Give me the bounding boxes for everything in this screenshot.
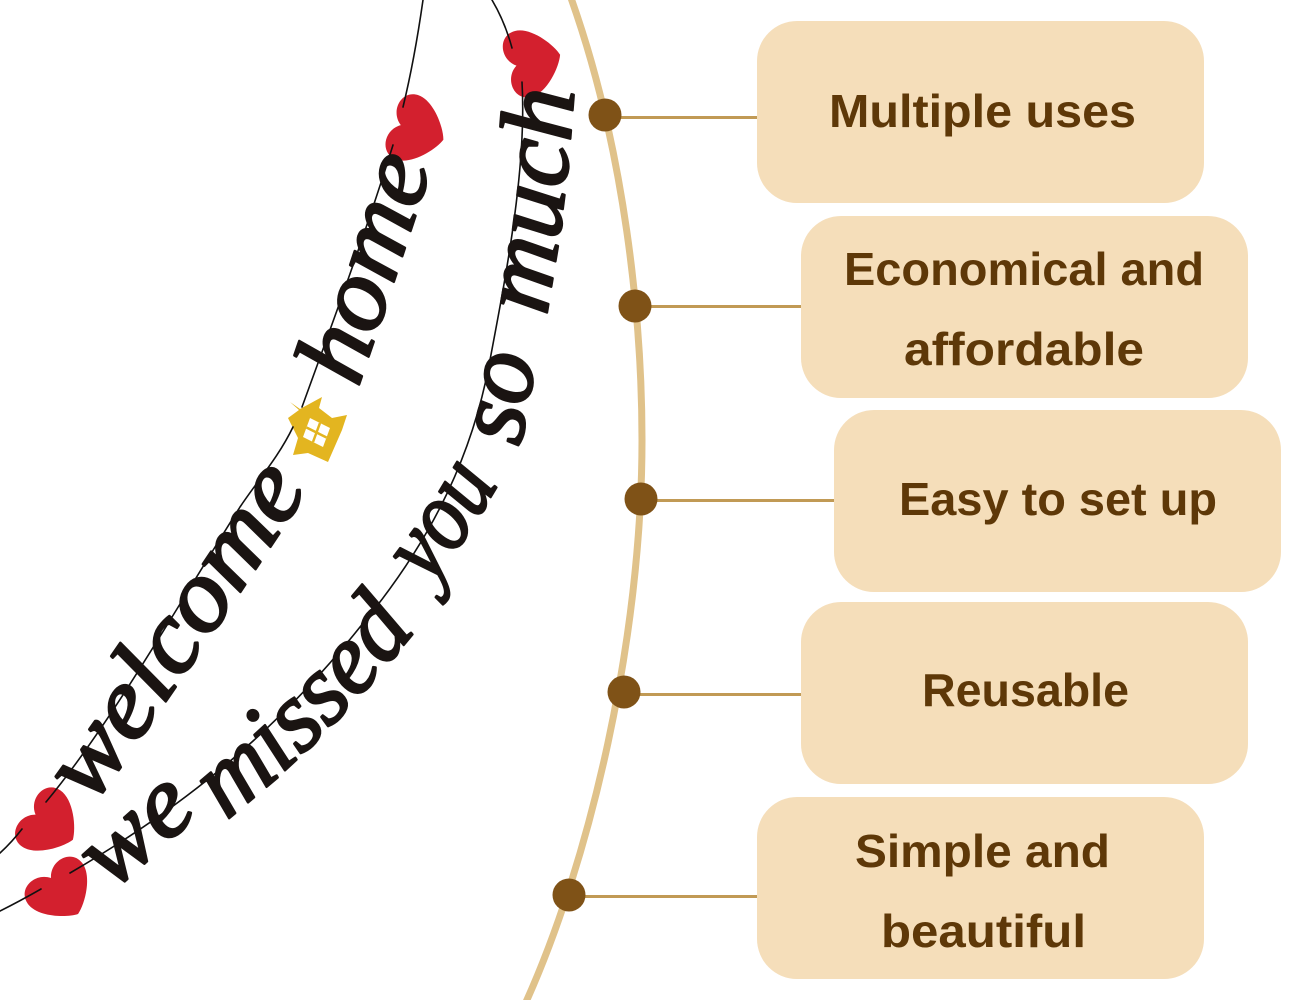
panel (834, 410, 1281, 592)
node dot (608, 676, 640, 708)
connector line (624, 693, 801, 696)
label: Economical and (844, 243, 1204, 295)
panel (801, 216, 1248, 398)
feature: multiple uses (588, 21, 1204, 203)
connector line (569, 895, 757, 898)
word: welcome: welcome (54, 466, 302, 794)
label (855, 825, 1110, 957)
word: missed: missed (199, 583, 414, 820)
node dot (624, 482, 658, 516)
connector line (641, 499, 834, 502)
word: we: we (81, 782, 192, 883)
banner: we missed you so much (0, 0, 638, 916)
node dot (618, 290, 652, 322)
label: Easy to set up (899, 473, 1217, 525)
banner string: we missed you so much (0, 0, 523, 911)
label: affordable (904, 323, 1144, 375)
curved arc (526, 0, 642, 1000)
heart: lower left (9, 781, 92, 868)
heart: upper (381, 90, 454, 172)
banner: welcome home (0, 0, 444, 854)
label: Multiple uses (829, 85, 1136, 137)
feature: easy to set up (624, 410, 1281, 592)
panel (801, 602, 1248, 784)
label: Reusable (922, 664, 1129, 716)
word: home: home (293, 154, 428, 386)
word: you: you (392, 460, 498, 606)
word: much: much (499, 91, 575, 314)
connector line (605, 116, 757, 119)
label: Simple and (855, 825, 1110, 877)
label: beautiful (881, 905, 1086, 957)
feature: economical and affordable (618, 216, 1248, 398)
word: so: so (476, 353, 534, 446)
icon: gold house (288, 397, 347, 462)
panel (757, 21, 1204, 203)
feature: simple and beautiful (552, 797, 1204, 979)
panel (757, 797, 1204, 979)
feature: reusable (608, 602, 1248, 784)
heart: lower (18, 850, 105, 934)
node dot (588, 98, 622, 132)
heart: top (499, 22, 568, 101)
banner string: welcome home (0, 0, 423, 853)
node dot (552, 878, 586, 912)
label (844, 243, 1204, 375)
connector line (635, 305, 801, 308)
